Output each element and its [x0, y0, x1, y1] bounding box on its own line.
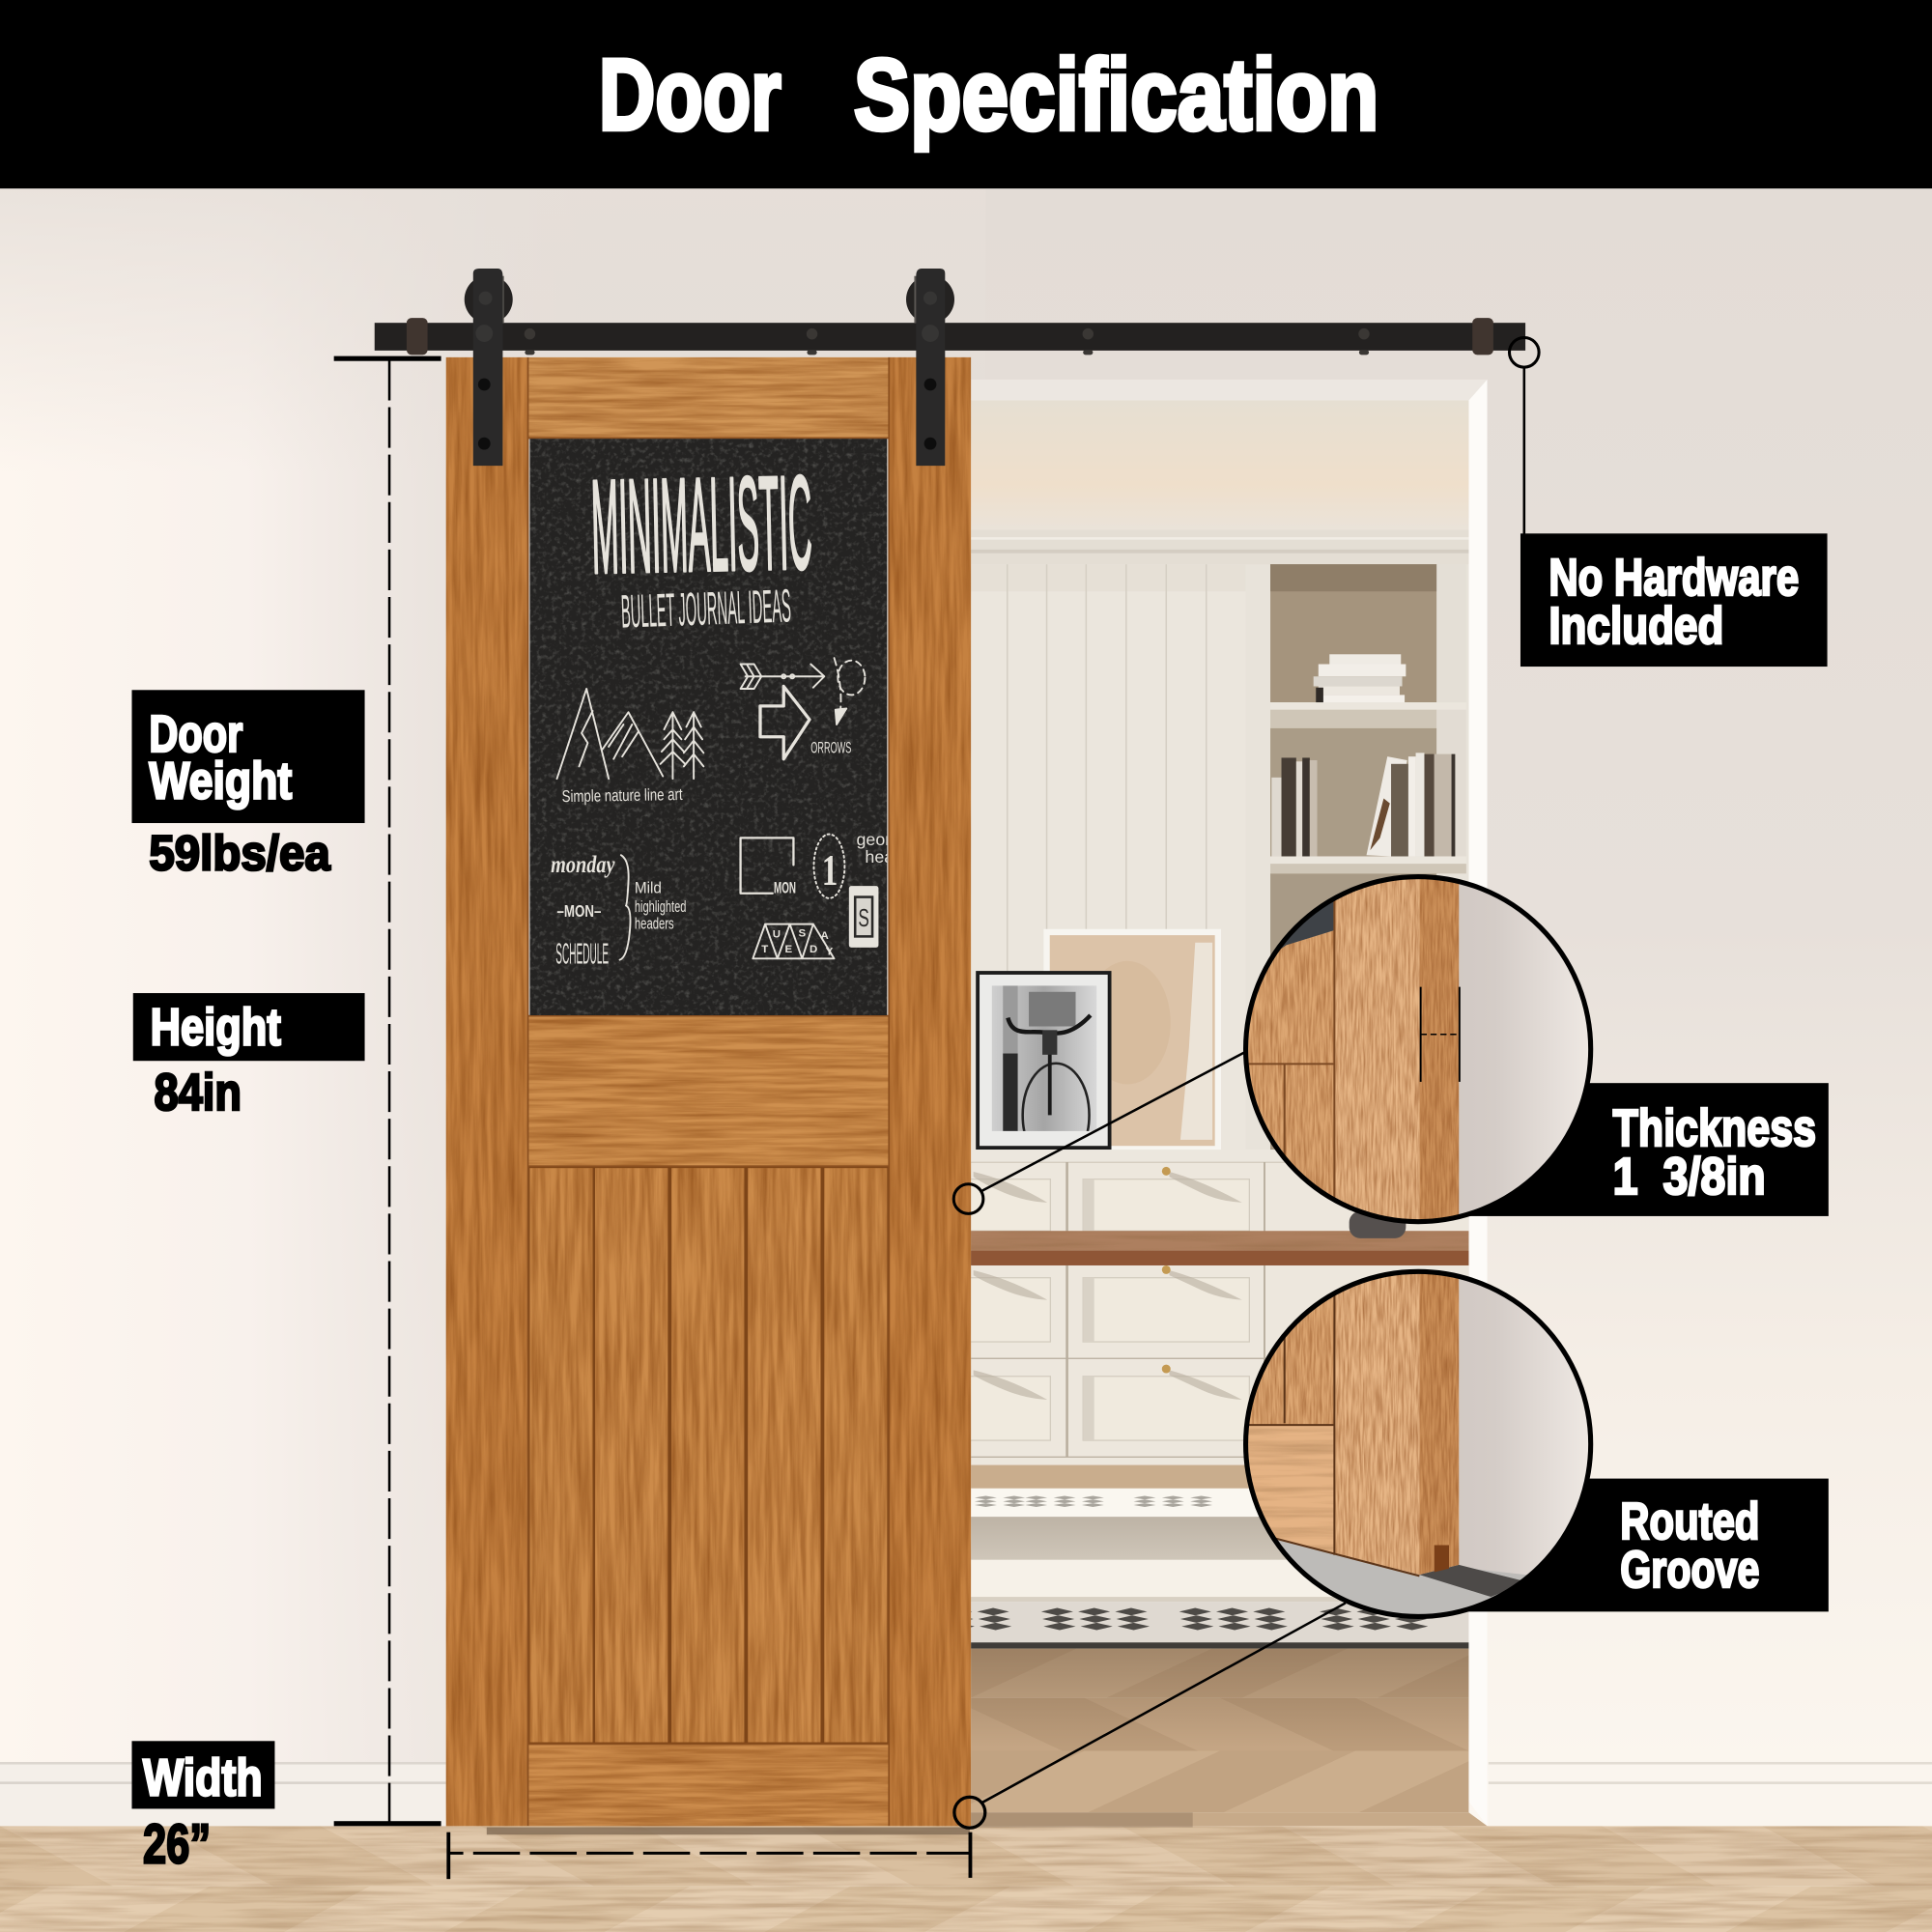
chalk tuesday bunting: E: [784, 944, 792, 955]
bottom rail: [528, 1745, 889, 1826]
callout: width: Width: [143, 1749, 263, 1806]
room floor: [971, 1649, 1488, 1828]
callout: no hardware label: Included: [1548, 598, 1723, 655]
chalk brace note: Mild: [635, 879, 662, 897]
callout: routed groove label: Groove: [1620, 1542, 1759, 1599]
chalk tuesday bunting: Y: [826, 947, 834, 958]
callout: no hardware leader: [1509, 337, 1539, 535]
plank panels: [528, 1166, 889, 1745]
callout: thickness label: 1 3/8in: [1613, 1149, 1766, 1206]
track bolts: [525, 328, 1370, 355]
chalk geometric headers: geometric: [856, 830, 932, 849]
callout: door weight: 59lbs/ea: [149, 826, 330, 881]
chalk feathered arrow: [741, 665, 824, 689]
title text: [599, 39, 1378, 152]
title text: Specification: [854, 39, 1378, 152]
magnified circle: routed groove: [1244, 1271, 1592, 1619]
chalk brace note: highlighted: [635, 897, 686, 916]
stacked books: [1314, 654, 1406, 702]
bookshelf: [1246, 564, 1468, 1155]
cabinet knobs: [1162, 1167, 1171, 1374]
chalk arrows caption: ORROWS: [810, 738, 851, 756]
chalk tuesday bunting: A: [820, 930, 829, 942]
chalk pine trees: [661, 712, 703, 779]
chalk nature caption: Simple nature line art: [561, 784, 683, 806]
recessed panels: [961, 1179, 1249, 1440]
floor: [0, 1826, 1932, 1932]
end stops: [407, 318, 1493, 355]
callout: routed groove label: [1454, 1479, 1829, 1611]
upright books: [1271, 753, 1455, 856]
callout: width: 26”: [143, 1814, 211, 1876]
callout: thickness label: Thickness: [1613, 1100, 1816, 1157]
callout: height: Height: [151, 1000, 281, 1057]
top rail: [528, 357, 889, 438]
chalkboard panel: [529, 439, 887, 1015]
left stile: [446, 357, 527, 1826]
cabinet fronts: [961, 1162, 1468, 1465]
chalkboard panel: SCHEDULE: [555, 937, 609, 970]
thickness measure mark: [1421, 987, 1460, 1082]
right hanger strap: [906, 269, 954, 466]
doorway interior room: [971, 380, 1488, 1828]
door opening trim: [971, 380, 1488, 1826]
magnified circle: door thickness: [1244, 876, 1592, 1224]
small speaker: [1350, 1211, 1406, 1238]
chalk monday: monday: [551, 850, 615, 878]
chalk box header: [741, 838, 796, 897]
chalk box header: MON: [774, 879, 796, 897]
back floor: [971, 1465, 1468, 1489]
crown moulding: [971, 529, 1468, 564]
callout: width: [131, 1741, 274, 1876]
callout: no hardware label: [1520, 533, 1828, 667]
chalk tuesday bunting: T: [761, 944, 768, 955]
desk shelf: [971, 1231, 1468, 1265]
callout: door weight: Door: [149, 706, 242, 763]
thickness leader line: [953, 1050, 1249, 1213]
chalkboard panel: BULLET JOURNAL IDEAS: [620, 580, 792, 639]
panelled wall: [971, 564, 1247, 1155]
callout: door weight: Weight: [149, 753, 292, 810]
knob shadows: [974, 1172, 1242, 1400]
routed groove leader line: [954, 1603, 1346, 1828]
barn door: [446, 357, 971, 1826]
callout: height: 84in: [154, 1065, 242, 1122]
chalk mountains: [557, 689, 663, 779]
baseboards: [0, 1762, 1932, 1826]
chalk dotted numeral: [813, 835, 844, 898]
chalk dashed loop arrow: [835, 658, 865, 724]
bicycle photo frame: [976, 971, 1112, 1167]
chalk dotted numeral: 1: [822, 845, 838, 895]
rug: [903, 1489, 1468, 1649]
chalk brace note: headers: [635, 915, 674, 933]
barn door track: [375, 318, 1525, 355]
right stile: [890, 357, 971, 1826]
height dimension line: [334, 356, 441, 1826]
routed groove notch: [1435, 1545, 1449, 1573]
ceiling: [971, 401, 1468, 529]
width dimension line: [446, 1833, 972, 1879]
chalk letter badge: S: [858, 905, 869, 932]
chalk brace note: [636, 881, 686, 929]
chalk letter badge: [849, 886, 878, 948]
chalk brace: [620, 855, 631, 960]
chalk tuesday bunting: S: [799, 927, 807, 939]
callout: thickness label: [1454, 1083, 1829, 1216]
infographic scene: MINIMALISTIC: [590, 448, 813, 602]
callout: routed groove label: Routed: [1620, 1493, 1759, 1550]
title text: Door: [599, 39, 781, 152]
middle rail: [528, 1016, 889, 1166]
sideboard top: [971, 1150, 1468, 1163]
chalk block arrow: [760, 686, 810, 759]
callout: height: [133, 993, 365, 1122]
chalk geometric headers: [857, 837, 887, 863]
title banner: [0, 0, 1932, 188]
rug diamond rows: [947, 1495, 1025, 1507]
callout: door weight: [131, 690, 365, 881]
chalk mon divider: –MON–: [557, 901, 602, 921]
chalk tuesday bunting: D: [810, 944, 817, 955]
door joints: [528, 357, 889, 1826]
chalk geometric headers: headers: [865, 847, 927, 867]
left hanger strap: [465, 269, 513, 466]
callout: no hardware label: No Hardware: [1548, 550, 1799, 607]
chalk tuesday bunting: U: [773, 929, 781, 941]
chalk tuesday bunting: [753, 924, 835, 958]
beige art frame: [1043, 929, 1221, 1152]
